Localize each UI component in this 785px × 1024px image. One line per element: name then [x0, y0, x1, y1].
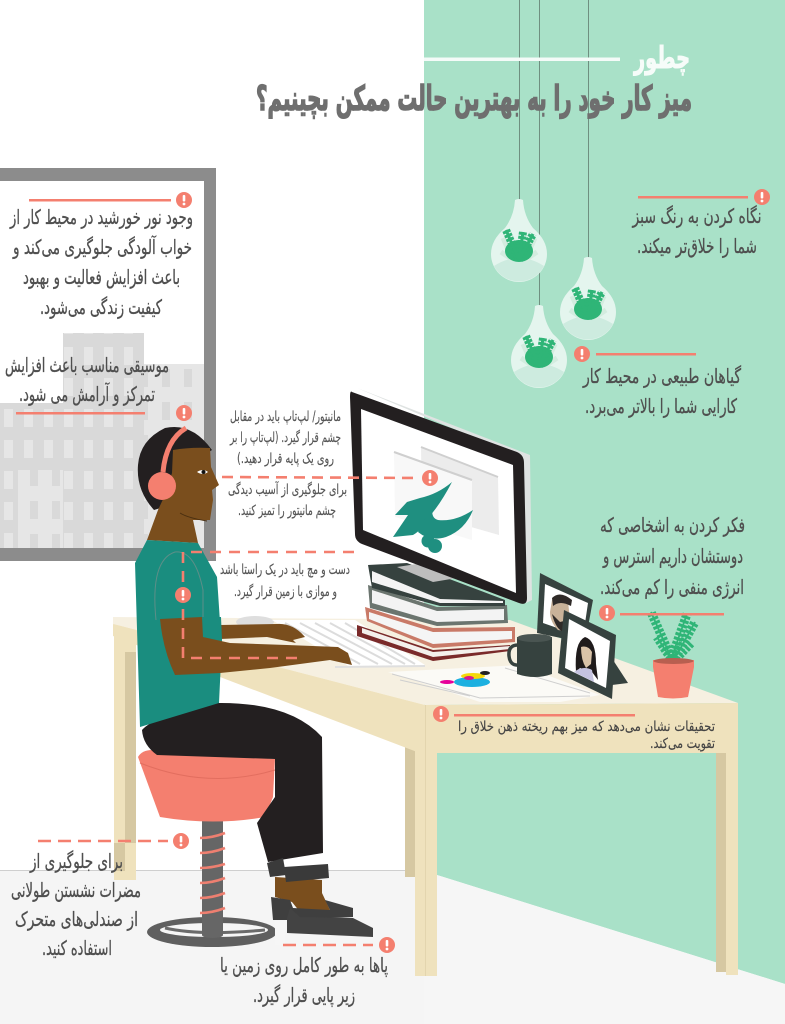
window with city view: [0, 168, 216, 561]
shoes: [271, 897, 353, 920]
potted plant: [651, 612, 695, 698]
callout: messy desk: [433, 706, 715, 752]
callout: window light: [9, 192, 193, 319]
legs and trousers: [142, 703, 323, 862]
callout: natural plants: [574, 346, 741, 418]
callout: arm and wrist: دست و مچ باید در یک راستا باشد: [220, 562, 350, 578]
hanging plant bulbs: [491, 199, 616, 388]
trouser cuffs: [267, 858, 286, 877]
callout: moving chairs: مضرات نشستن طولانی: [11, 878, 141, 902]
callout: music: موسیقی مناسب باعث افزایش: [5, 353, 169, 377]
logo: [393, 482, 473, 553]
callout: window light: کیفیت زندگی می‌شود.: [40, 295, 162, 319]
callout: window light: وجود نور خورشید در محیط کار از: [9, 205, 193, 229]
callout: monitor position: برای جلوگیری از آسیب دیدگی: [228, 481, 347, 498]
callout: green colour: [632, 189, 770, 258]
ankles: [275, 877, 330, 912]
callout: arm and wrist: [175, 552, 358, 658]
callout: loved ones photos: [599, 513, 745, 621]
stool: [138, 750, 285, 947]
title: چطور: [633, 41, 690, 76]
callout: music: [5, 353, 192, 421]
callout: messy desk: تقویت می‌کند.: [650, 736, 715, 752]
shirt: [135, 540, 222, 727]
stack of books: [357, 563, 515, 661]
callout: window light: باعث افزایش فعالیت و بهبود: [23, 265, 180, 289]
callout: feet on floor: پاها به طور کامل روی زمین یا: [220, 953, 388, 978]
callout: moving chairs: از صندلی‌های متحرک: [15, 907, 138, 931]
callout: monitor position: چشم مانیتور را تمیز کنید.: [238, 503, 336, 519]
keyboard and mouse: [236, 616, 425, 667]
callout: arm and wrist: و موازی با زمین قرار گیرد.: [234, 583, 337, 600]
person: [135, 427, 373, 937]
photo frame: woman: [558, 610, 628, 699]
callout: moving chairs: استفاده کنید.: [42, 936, 112, 960]
callout: monitor position: [222, 409, 438, 519]
callout: window light: خواب آلودگی جلوگیری می‌کند و: [12, 234, 192, 259]
coffee mug: [509, 634, 552, 677]
callout: music: تمرکز و آرامش می شود.: [19, 381, 155, 406]
callout: moving chairs: [11, 833, 189, 960]
callout: monitor position: چشم قرار گیرد. (لپ‌تاپ را بر: [229, 429, 341, 446]
callout: monitor position: روی یک پایه قرار دهید.): [237, 451, 334, 467]
hair and head: [138, 427, 212, 510]
papers with colour blot: [388, 665, 600, 702]
title: [256, 41, 692, 119]
near arm: [160, 617, 352, 675]
callout: monitor position: مانیتور/ لپ‌تاپ باید در مقابل: [230, 409, 341, 425]
callout: moving chairs: برای جلوگیری از: [29, 849, 123, 873]
callout: feet on floor: [220, 937, 395, 1008]
desk: [113, 617, 738, 976]
callout: feet on floor: زیر پایی قرار گیرد.: [253, 983, 355, 1008]
hanging wires: [520, 0, 588, 307]
callout: messy desk: تحقیقات نشان می‌دهد که میز بهم ریخته ذهن خلاق را: [458, 719, 715, 735]
headphones: [163, 428, 186, 472]
far arm: [220, 624, 305, 643]
photo frame: man: [537, 573, 593, 643]
monitor with logo: [350, 388, 532, 604]
